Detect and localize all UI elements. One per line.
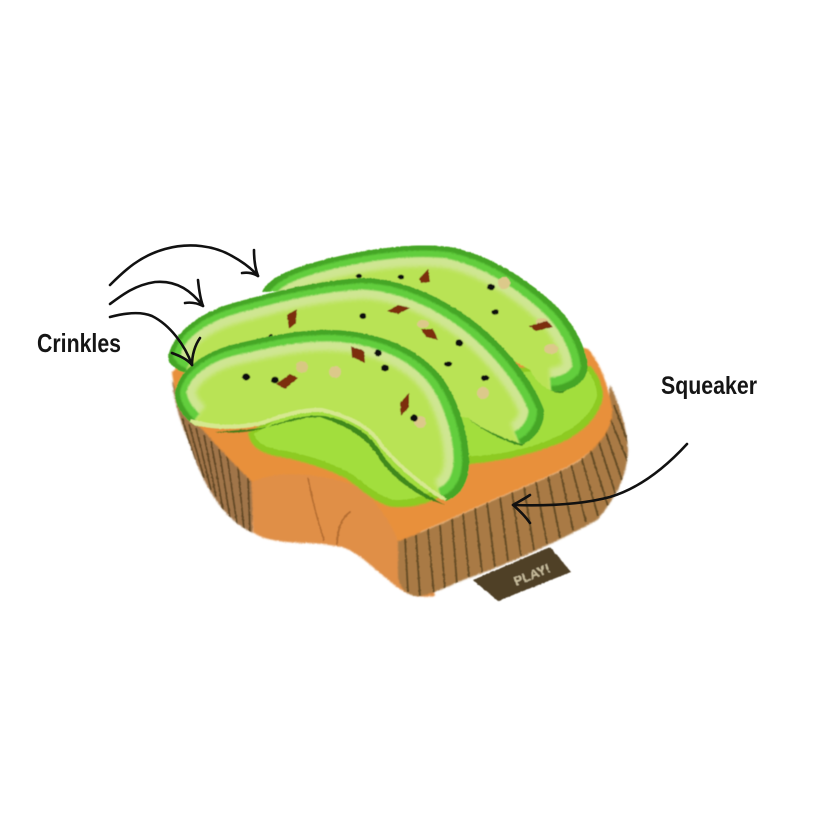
front slice pale lip: [190, 411, 445, 501]
avocado slice: middle: [166, 276, 544, 446]
toast: orange top face: [172, 300, 612, 541]
brand tag: [473, 547, 571, 601]
product: avocado toast plush toy: [166, 243, 629, 601]
toast: front fabric folds: [308, 478, 350, 544]
guacamole spread: [248, 366, 603, 507]
toast: right corduroy crust: [398, 385, 629, 597]
infographic canvas: [38, 244, 757, 602]
toast: left corduroy crust: [172, 380, 256, 533]
toast: orange front face: [251, 455, 435, 597]
arrow: crinkles to front slice: [110, 313, 200, 365]
avocado slice: back: [260, 243, 588, 393]
middle slice speckles: [268, 305, 489, 399]
back slice speckles: [356, 269, 558, 354]
arrow: squeaker: [513, 444, 687, 523]
label: Crinkles: Crinkles: [37, 328, 121, 358]
label: Squeaker: Squeaker: [661, 372, 757, 400]
brand tag: PLAY!: [512, 561, 552, 589]
arrow: crinkles to back slice: [110, 245, 258, 285]
arrow: crinkles to middle slice: [110, 280, 203, 306]
front slice speckles: [242, 346, 426, 428]
avocado slice: front: [173, 328, 469, 505]
